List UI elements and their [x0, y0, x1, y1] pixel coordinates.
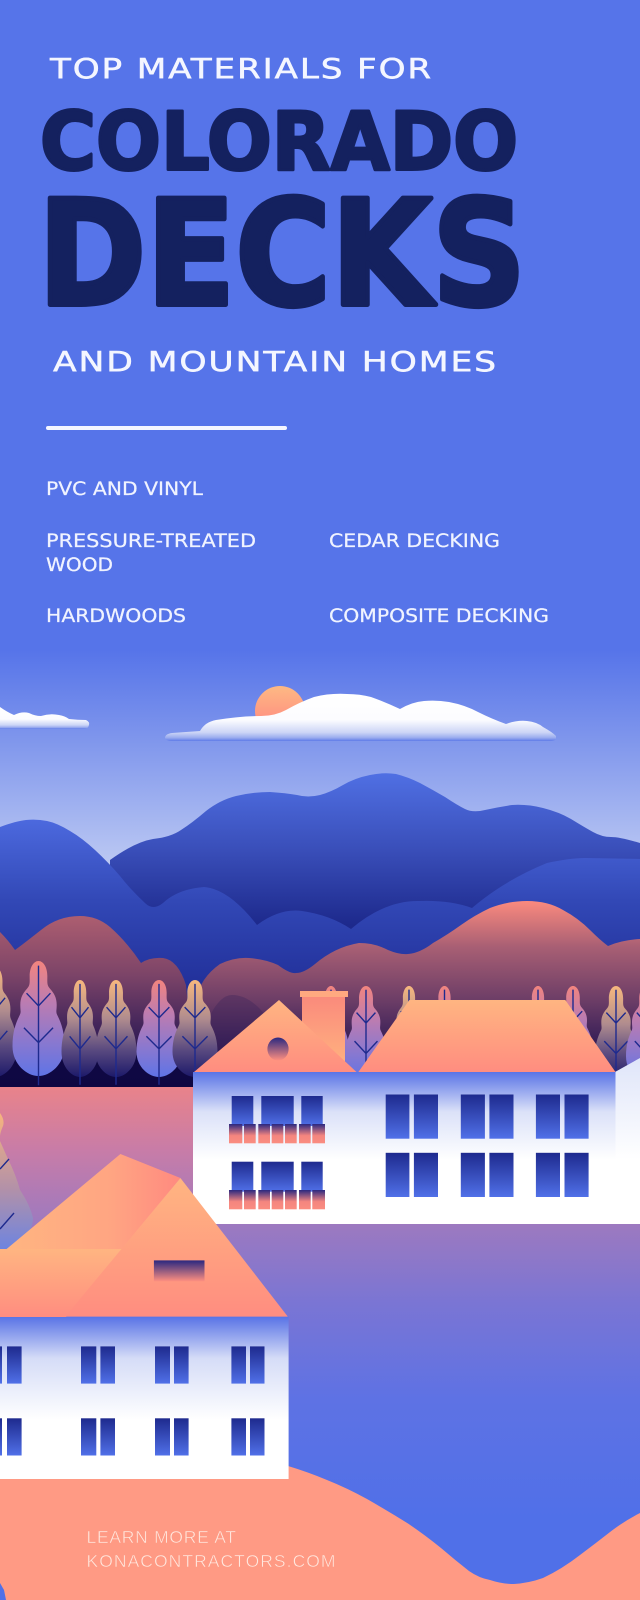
- tree: [172, 980, 218, 1085]
- back roof face: [6, 1154, 180, 1250]
- sun: [255, 686, 305, 736]
- item: hardwoods: HARDWOODS: [46, 605, 186, 627]
- mountains: back range: [110, 773, 640, 1000]
- ground: [0, 1087, 640, 1600]
- learn more at: LEARN MORE AT: [86, 1527, 236, 1547]
- front gable roof: [65, 1178, 288, 1317]
- gable window: [267, 1038, 289, 1060]
- tree: [520, 986, 556, 1083]
- balcony railings: [229, 1124, 325, 1209]
- windows: [0, 1346, 264, 1456]
- dark tree line band: [0, 1055, 195, 1087]
- tree row: [0, 961, 640, 1089]
- item: pressure-treated wood: WOOD: [46, 554, 113, 576]
- footer text: [86, 1527, 336, 1571]
- tree: [595, 986, 637, 1089]
- material list: [46, 478, 549, 627]
- item: pvc and vinyl: PVC AND VINYL: [46, 478, 203, 500]
- item: pressure-treated wood: PRESSURE-TREATED: [46, 530, 256, 552]
- tree: [0, 967, 17, 1086]
- heading: colorado: COLORADO: [40, 96, 518, 188]
- heading: and mountain homes: AND MOUNTAIN HOMES: [53, 345, 498, 378]
- upper house: [193, 991, 640, 1224]
- right annex wall: [615, 1058, 640, 1224]
- mountains: middle range: [0, 820, 640, 1090]
- item: cedar decking: CEDAR DECKING: [329, 530, 500, 552]
- cloud: main: [165, 694, 556, 741]
- heading: decks: DECKS: [38, 170, 526, 340]
- gable roof: [194, 1000, 356, 1072]
- hills: right red hill: [196, 901, 640, 1090]
- tree: [313, 986, 349, 1083]
- divider line: [46, 426, 287, 430]
- dormer vent: [154, 1260, 204, 1281]
- tree: [553, 986, 593, 1083]
- wall: [193, 1072, 616, 1224]
- tree: [13, 961, 65, 1085]
- blue header background: [0, 0, 640, 660]
- cloud: left: [0, 707, 89, 729]
- wall: [0, 1317, 289, 1479]
- balcony windows: [232, 1096, 323, 1192]
- tree: [626, 986, 640, 1089]
- main roof: [358, 1000, 616, 1072]
- left foreground tree: [0, 1113, 33, 1250]
- tree: [391, 986, 427, 1083]
- small blue corner: [0, 1583, 6, 1600]
- tree: [136, 980, 182, 1085]
- tree: [346, 986, 386, 1089]
- tree: [96, 980, 136, 1085]
- chimney: [300, 991, 348, 1062]
- heading: top materials for: TOP MATERIALS FOR: [49, 52, 433, 85]
- sky: [0, 650, 640, 1100]
- website: KONACONTRACTORS.COM: [86, 1551, 336, 1571]
- item: composite decking: COMPOSITE DECKING: [329, 605, 549, 627]
- title block: [38, 52, 526, 378]
- lower house: [0, 1154, 289, 1479]
- dark hump: [200, 995, 275, 1090]
- hills: left red hill: [0, 916, 195, 1090]
- tree: [62, 980, 98, 1085]
- foreground hill: [0, 1466, 640, 1600]
- left roof face: [0, 1249, 122, 1317]
- windows: [386, 1094, 589, 1197]
- tree: [426, 986, 462, 1083]
